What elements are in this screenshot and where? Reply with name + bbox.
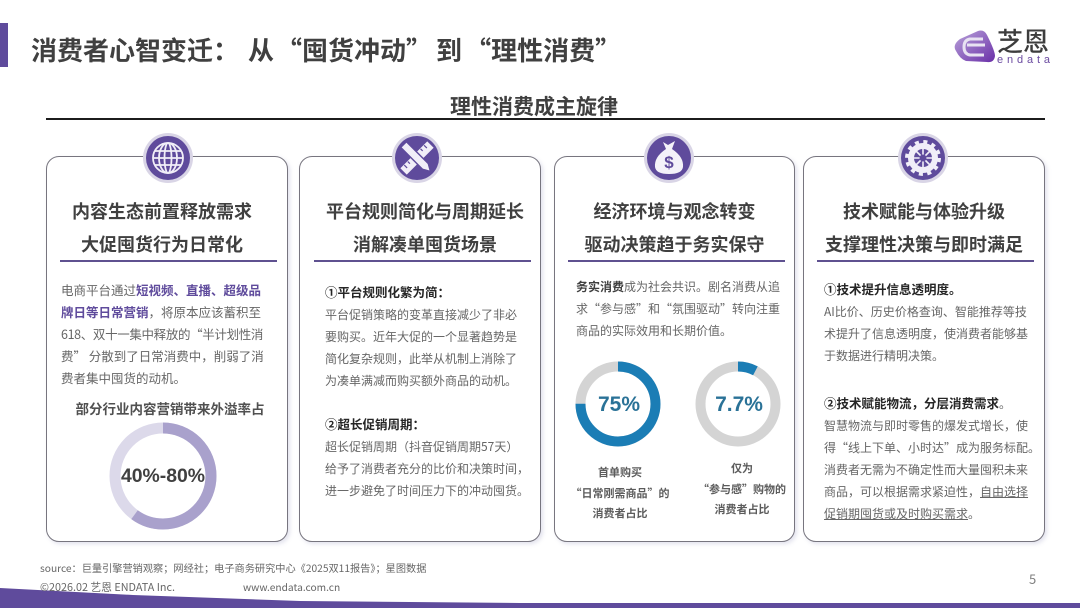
panel 4 section two: 得“线上下单、小时达”成为服务标配。 [824,439,1040,456]
panel 4 section two: 促销期囤货或及时购买需求。 [824,505,980,522]
panel 2 heading: 消解凑单囤货场景 [353,231,497,257]
panel: economic environment [554,156,795,542]
subtitle underline [46,118,1045,120]
panel 1 body text: 费” 分散到了日常消费中，削弱了消 [61,346,264,365]
panel 2 section two: 给予了消费者充分的比价和决策时间， [325,460,529,477]
panel 2 heading rule [314,260,531,262]
panel 4 heading: 支撑理性决策与即时满足 [825,231,1023,257]
panel 4 section one: 于数据进行精明决策。 [824,347,944,364]
panel 4 section two: 智慧物流与即时零售的爆发式增长，使 [824,417,1028,434]
panel: content ecosystem [46,156,288,542]
icon: globe [143,133,193,183]
panel 4 heading: 技术赋能与体验升级 [843,198,1005,224]
panel 3 body text: 务实消费成为社会共识。剧名消费从追 [576,278,780,295]
donut chart: 7.7%: 7.7% [715,393,763,416]
panel 3 body text: 商品的实际效用和长期价值。 [576,322,732,339]
panel 1 body text: 牌日等日常营销，将原本应该蓄积至 [61,302,261,321]
panel 2 section one: 为凑单满减而购买额外商品的动机。 [325,372,517,389]
panel 1 body text: 电商平台通过短视频、直播、超级品 [61,280,261,299]
label: 75%: “日常刚需商品”的 [570,484,670,500]
title accent bar [0,23,8,67]
panel 4 heading rule [817,260,1034,262]
panel 2 section one [325,282,517,389]
panel 2 section two: 超长促销周期（抖音促销周期57天） [325,438,518,455]
panel 3 heading: 经济环境与观念转变 [594,198,756,224]
panel 1 heading: 大促囤货行为日常化 [81,231,243,257]
panel 4 section one: ①技术提升信息透明度。 [824,279,962,298]
panel 4 section two: ②技术赋能物流，分层消费需求。 [824,393,1011,412]
panel 3 heading: 驱动决策趋于务实保守 [584,231,764,257]
title: 消费者心智变迁： 从“囤货冲动”到“理性消费” [31,31,621,68]
panel 3 heading rule [568,260,785,262]
label: 75% [570,464,670,521]
panel 2 section one: 简化复杂规则，此举从机制上消除了 [325,350,517,367]
donut chart: 7.7% [696,362,780,446]
panel 2 section two: ②超长促销周期： [325,414,425,433]
icon: money bag: $ [664,153,674,172]
logo: endata: endata [997,54,1051,66]
page number: 5 [1029,569,1036,588]
panel 2 heading: 平台规则简化与周期延长 [326,198,524,224]
footer wedge [0,588,1080,608]
donut chart: 40%-80% [110,422,216,530]
subtitle: 理性消费成主旋律 [450,91,618,121]
panel 2 section two [325,414,529,499]
icon: money bag [644,133,694,183]
panel 3 body text: 求“参与感”和“氛围驱动”转向注重 [576,300,780,317]
panel: technology [803,156,1045,542]
panel 1 body text [61,280,264,387]
panel 1 heading [72,198,252,257]
panel 4 section one: 术提升了信息透明度，使消费者能够基 [824,325,1028,342]
icon: gear [898,133,948,183]
panel 3 body text [576,278,780,339]
panel 4 section one: AI比价、历史价格查询、智能推荐等技 [824,303,1027,320]
label: 75%: 消费者占比 [592,505,648,521]
panel 2 heading [326,198,524,257]
panel 4 section one [824,279,1028,364]
panel 1 heading: 内容生态前置释放需求 [72,198,252,224]
panel 1 body text: 费者集中囤货的动机。 [61,368,186,387]
panel 3 heading [584,198,764,257]
panel 2 section one: 要购买。近年大促的一个显著趋势是 [325,328,517,345]
panel 2 section two: 进一步避免了时间压力下的冲动囤货。 [325,482,529,499]
logo: endata [954,25,1051,66]
panel 4 section two: 商品，可以根据需求紧迫性，自由选择 [824,483,1028,500]
label: 7.7%: 消费者占比 [714,501,770,517]
panel 2 section one: ①平台规则化繁为简： [325,282,450,301]
label: 7.7% [698,460,786,517]
website: www.endata.com.cn [243,579,340,594]
label: 7.7%: 仅为 [731,460,753,476]
label: 7.7%: “参与感”购物的 [698,480,786,496]
panel 4 section two: 消费者无需为不确定性而大量囤积未来 [824,461,1028,478]
label: 75%: 首单购买 [598,464,642,480]
panel 1 chart title: 部分行业内容营销带来外溢率占 [76,398,264,418]
donut chart: 40%-80%: 40%-80% [121,465,205,487]
source note: source：巨量引擎营销观察；网经社；电子商务研究中心《2025双11报告》；星图数据 [40,560,426,575]
panel: platform rules [299,156,541,542]
panel 1 body text: 618、双十一集中释放的“半计划性消 [61,324,263,343]
panel 1 heading rule [60,260,277,262]
donut chart: 75%: 75% [598,393,640,416]
panel 2 section one: 平台促销策略的变革直接减少了非必 [325,306,517,323]
copyright: ©2026.02 艺恩 ENDATA Inc. [40,579,175,595]
icon: ruler and pencil [392,133,442,183]
panel 4 section two [824,393,1040,522]
donut chart: 75% [576,362,660,446]
panel 4 heading [825,198,1023,257]
